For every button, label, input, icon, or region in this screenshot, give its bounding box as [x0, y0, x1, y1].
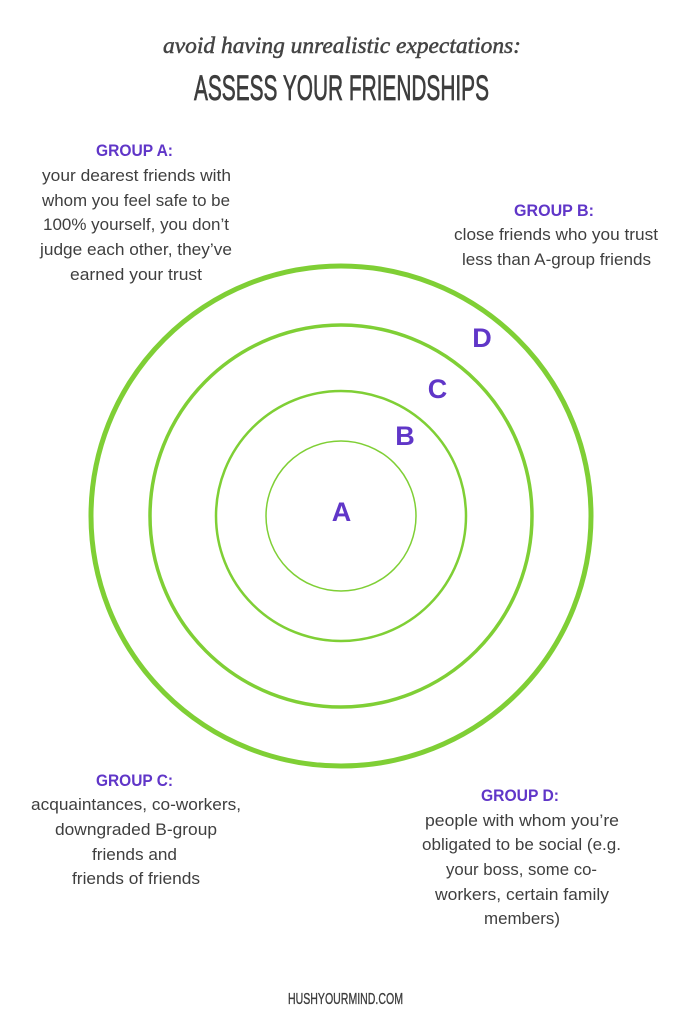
text block: group B [454, 202, 658, 269]
ring: group C boundary [150, 325, 532, 707]
description: group C: downgraded B-group [55, 820, 217, 839]
heading: group B: GROUP B: [514, 202, 594, 220]
description: group B: less than A-group friends [462, 250, 651, 269]
description: group D: members) [484, 909, 560, 928]
description: group A: whom you feel safe to be [41, 191, 230, 210]
subtitle: avoid having unrealistic expectations: [163, 33, 521, 58]
description: group A: your dearest friends with [42, 166, 231, 185]
concentric circles diagram [91, 266, 591, 766]
description: group A [39, 166, 232, 284]
ring: group A boundary [266, 441, 416, 591]
text block: group D [422, 787, 621, 928]
description: group C [31, 795, 241, 888]
ring letter C: C [428, 374, 447, 404]
ring letter A: A [332, 497, 351, 527]
heading: group C: GROUP C: [96, 772, 173, 790]
description: group B [454, 225, 658, 269]
description: group C: friends of friends [72, 869, 200, 888]
description: group A: earned your trust [70, 265, 202, 284]
heading: group A: GROUP A: [96, 142, 173, 160]
description: group C: friends and [92, 845, 177, 864]
description: group C: acquaintances, co-workers, [31, 795, 241, 814]
ring letter B: B [395, 421, 415, 451]
text block: group A [39, 142, 232, 284]
description: group B: close friends who you trust [454, 225, 658, 244]
description: group D: obligated to be social (e.g. [422, 835, 621, 854]
ring: group D boundary [91, 266, 591, 766]
title: ASSESS YOUR FRIENDSHIPS [194, 69, 489, 108]
description: group D: people with whom you’re [425, 811, 619, 830]
footer website: HUSHYOURMIND.COM [288, 991, 403, 1008]
heading: group D: GROUP D: [481, 787, 559, 805]
description: group A: 100% yourself, you don’t [43, 215, 229, 234]
ring: group B boundary [216, 391, 466, 641]
description: group D: workers, certain family [434, 885, 609, 904]
description: group A: judge each other, they’ve [39, 240, 232, 259]
text block: group C [31, 772, 241, 888]
description: group D: your boss, some co- [446, 860, 597, 879]
description: group D [422, 811, 621, 928]
ring letter D: D [472, 323, 492, 353]
